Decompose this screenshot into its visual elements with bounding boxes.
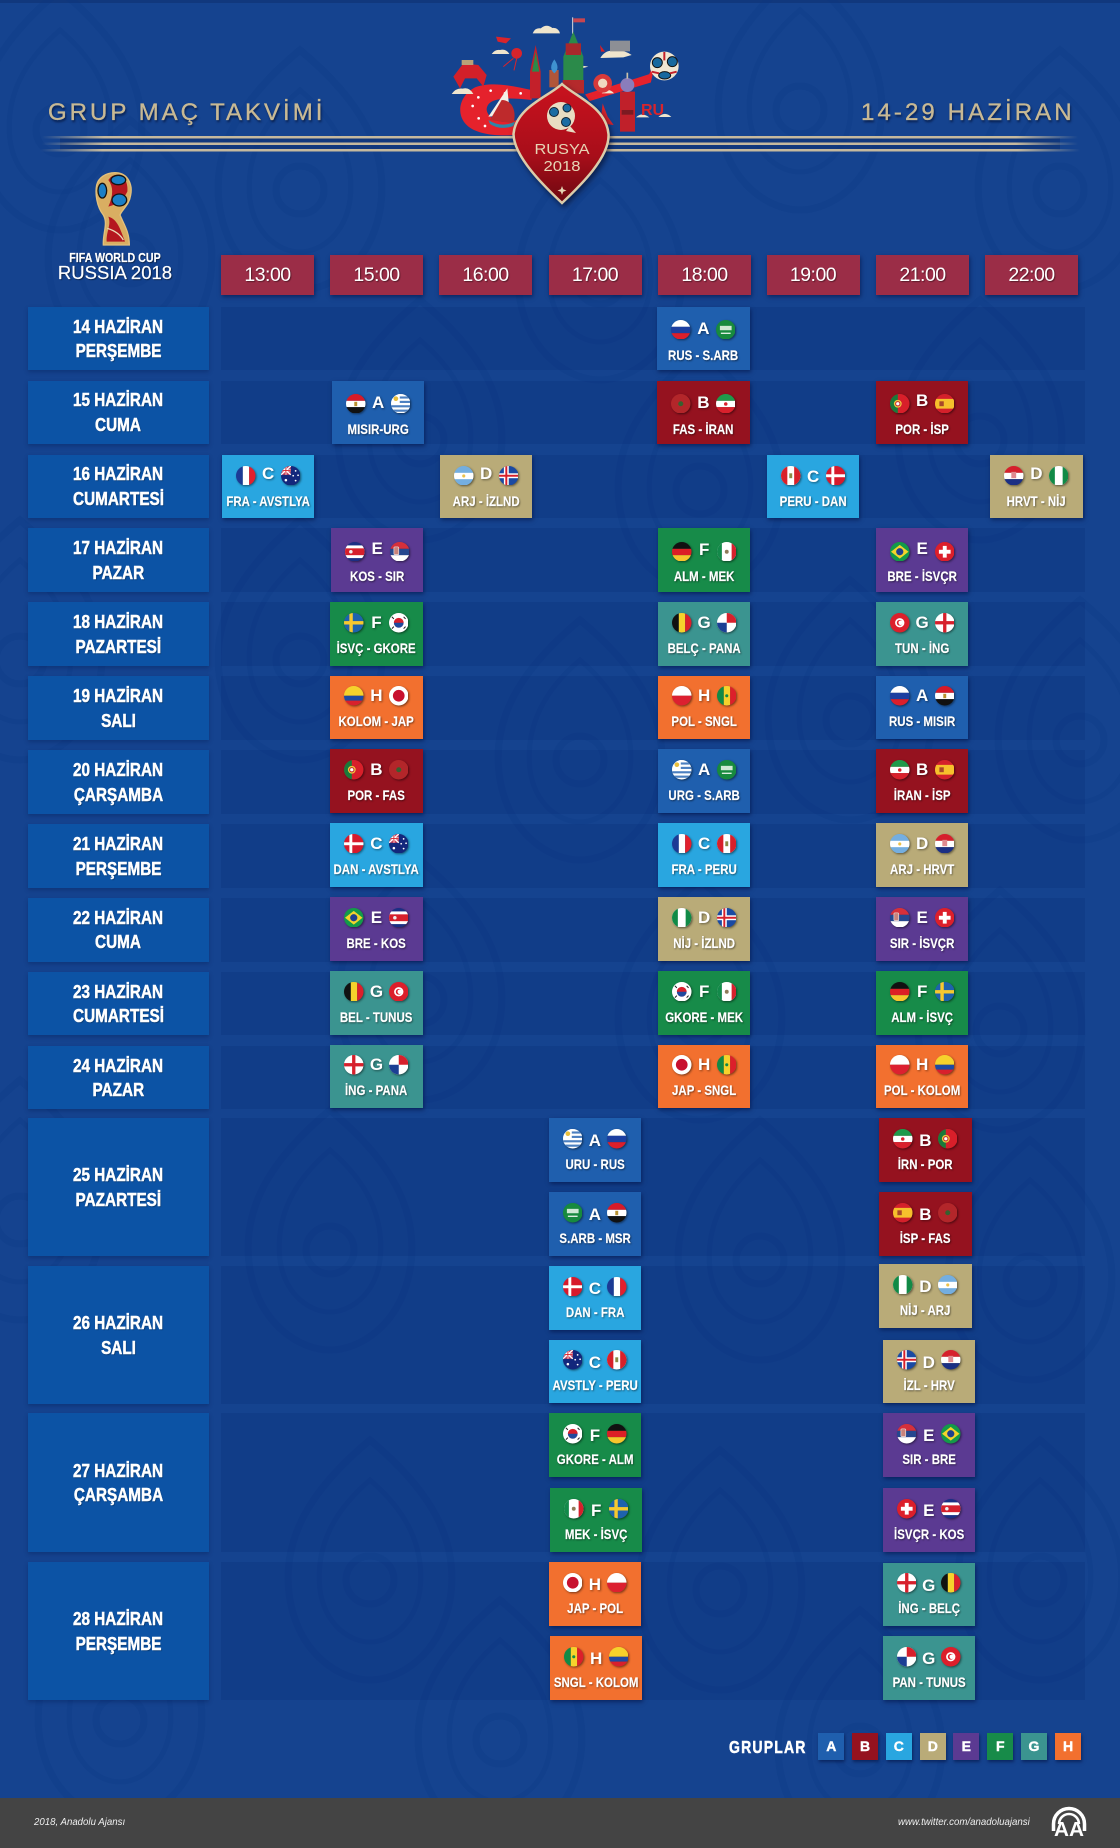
match: KOLOM - JAP	[330, 676, 423, 739]
day: 28 Haziran: PERŞEMBE	[75, 1634, 161, 1654]
match: İRAN - İSP: B	[916, 760, 928, 779]
match: JAP - POL: H	[589, 1575, 601, 1594]
day: 20 Haziran: 20 HAZİRAN	[73, 760, 163, 780]
day: 14 Haziran	[28, 307, 209, 370]
match: RUS - S.ARB: A	[697, 319, 710, 338]
legend chip E: E	[962, 1738, 971, 1754]
time: 18:00: 18:00	[681, 264, 728, 286]
match: ARJ - HRVT: ARJ - HRVT	[890, 860, 954, 876]
day: 14 Haziran: 14 HAZİRAN	[73, 317, 163, 337]
match: SIR - BRE	[883, 1413, 975, 1477]
match: SIR - İSVÇR: SIR - İSVÇR	[890, 934, 954, 950]
match: POR - İSP: POR - İSP	[895, 421, 949, 437]
day: 16 Haziran: 16 HAZİRAN	[73, 464, 163, 484]
match: FAS - İRAN: FAS - İRAN	[673, 421, 734, 437]
match: NİJ - İZLND: NİJ - İZLND	[673, 934, 735, 950]
day: 25 Haziran	[28, 1118, 209, 1256]
match: İRN - POR: B	[919, 1131, 932, 1150]
time: 22:00: 22:00	[1008, 264, 1055, 286]
day: 15 Haziran: 15 HAZİRAN	[73, 390, 163, 410]
match: DAN - FRA: C	[589, 1279, 601, 1298]
match: BRE - KOS	[330, 897, 423, 961]
match: MEK - İSVÇ: F	[591, 1501, 601, 1520]
match: PAN - TUNUS	[883, 1636, 975, 1700]
match: KOS - SIR: KOS - SIR	[350, 568, 404, 584]
match: İSP - FAS: İSP - FAS	[900, 1230, 951, 1246]
match: POL - SNGL: H	[698, 686, 710, 705]
day: 18 Haziran: PAZARTESİ	[75, 637, 161, 657]
day: 15 Haziran: CUMA	[95, 415, 141, 435]
day: 19 Haziran: SALI	[101, 711, 136, 731]
time: 21:00	[876, 255, 969, 295]
day: 25 Haziran: 25 HAZİRAN	[73, 1165, 163, 1185]
match: SIR - BRE: E	[923, 1426, 934, 1445]
match: SNGL - KOLOM	[550, 1636, 642, 1700]
match: İNG - BELÇ	[883, 1563, 975, 1626]
match: İZL - HRV	[883, 1340, 975, 1403]
footer url: www.twitter.com/anadoluajansi	[898, 1816, 1030, 1828]
time: 13:00	[221, 255, 314, 295]
day: 16 Haziran	[28, 454, 209, 518]
match: NİJ - ARJ	[879, 1264, 972, 1328]
match: S.ARB - MSR	[549, 1192, 641, 1256]
day: 27 Haziran: ÇARŞAMBA	[74, 1485, 163, 1505]
match: GKORE - ALM: GKORE - ALM	[557, 1451, 633, 1467]
match: SIR - İSVÇR	[876, 897, 968, 961]
match: ALM - İSVÇ	[876, 971, 968, 1035]
match: RUS - S.ARB	[657, 307, 750, 370]
match: URG - S.ARB: A	[698, 760, 710, 779]
match: BELÇ - PANA: BELÇ - PANA	[668, 640, 741, 656]
day: 27 Haziran: 27 HAZİRAN	[73, 1461, 163, 1481]
day: 27 Haziran	[28, 1413, 209, 1552]
day: 22 Haziran	[28, 898, 209, 962]
badge: Rusya 2018: 2018	[544, 158, 580, 175]
match: İSVÇR - KOS: İSVÇR - KOS	[894, 1526, 964, 1542]
day: 24 Haziran	[28, 1046, 209, 1109]
day: 24 Haziran: PAZAR	[92, 1080, 144, 1100]
match: NİJ - ARJ: NİJ - ARJ	[900, 1302, 951, 1318]
match: BEL - TUNUS	[330, 971, 423, 1035]
match: POL - SNGL: POL - SNGL	[671, 713, 737, 729]
match: PERU - DAN	[767, 454, 859, 518]
match: ALM - MEK: F	[699, 540, 709, 559]
match: DAN - AVSTLYA: DAN - AVSTLYA	[334, 860, 419, 876]
legend chip A: A	[826, 1738, 836, 1754]
match: SIR - İSVÇR: E	[916, 908, 928, 926]
match: PERU - DAN: C	[807, 466, 819, 486]
legend chip C	[886, 1733, 912, 1760]
match: İSVÇR - KOS: E	[923, 1501, 934, 1520]
match: SIR - BRE: SIR - BRE	[902, 1451, 956, 1467]
match: JAP - SNGL: JAP - SNGL	[672, 1082, 736, 1098]
day: 21 Haziran: PERŞEMBE	[75, 859, 161, 879]
match: BRE - İSVÇR: BRE - İSVÇR	[887, 568, 957, 584]
match: KOLOM - JAP: H	[370, 686, 383, 705]
badge: Rusya 2018: RUSYA	[534, 141, 590, 158]
match: NİJ - İZLND	[658, 897, 750, 961]
legend chip G	[1021, 1733, 1047, 1760]
match: İRN - POR	[879, 1118, 972, 1182]
day: 23 Haziran	[28, 972, 209, 1035]
day: 20 Haziran	[28, 750, 209, 814]
match: ALM - MEK: ALM - MEK	[674, 568, 734, 584]
match: FAS - İRAN: B	[697, 393, 710, 412]
match: DAN - FRA: DAN - FRA	[566, 1304, 624, 1320]
match: İSVÇ - GKORE: İSVÇ - GKORE	[337, 640, 416, 656]
match: MISIR-URG: MISIR-URG	[348, 421, 409, 437]
time: 13:00: 13:00	[244, 264, 291, 286]
time: 19:00	[766, 255, 860, 295]
match: KOLOM - JAP: KOLOM - JAP	[339, 713, 414, 729]
match: İSVÇ - GKORE: F	[371, 613, 382, 632]
match: İRAN - İSP	[876, 749, 968, 813]
date range: 14-29 HAZİRAN	[861, 99, 1075, 126]
legend chip G: G	[1029, 1738, 1039, 1754]
match: POL - SNGL	[658, 676, 750, 739]
match: İSVÇ - GKORE	[330, 602, 423, 666]
day: 21 Haziran	[28, 824, 209, 888]
match: POL - KOLOM: H	[916, 1055, 928, 1074]
match: İNG - PANA	[330, 1045, 423, 1108]
legend chip B: B	[860, 1738, 870, 1754]
match: İNG - BELÇ: G	[922, 1576, 935, 1595]
legend title: GRUPLAR	[729, 1737, 807, 1757]
time: 22:00	[985, 255, 1078, 295]
match: TUN - İNG: TUN - İNG	[895, 640, 949, 656]
day: 25 Haziran: PAZARTESİ	[75, 1190, 161, 1210]
match: ALM - MEK	[658, 528, 750, 592]
legend chip C: C	[894, 1738, 904, 1754]
match: BEL - TUNUS: G	[370, 982, 383, 1000]
match: GKORE - ALM	[549, 1413, 641, 1477]
match: GKORE - MEK	[658, 971, 750, 1035]
match: S.ARB - MSR: A	[589, 1205, 601, 1224]
match: PAN - TUNUS: G	[922, 1649, 935, 1668]
match: İRN - POR: İRN - POR	[898, 1156, 953, 1172]
time: 15:00	[330, 255, 423, 295]
footer	[0, 1798, 1120, 1848]
match: URG - S.ARB: URG - S.ARB	[668, 787, 740, 803]
match: İNG - PANA: İNG - PANA	[345, 1082, 408, 1098]
match: HRVT - NİJ	[990, 454, 1083, 518]
time: 19:00: 19:00	[790, 264, 836, 286]
match: FRA - PERU	[658, 823, 750, 887]
match: SNGL - KOLOM: SNGL - KOLOM	[554, 1674, 638, 1690]
icon: trophy	[95, 172, 132, 246]
match: POL - KOLOM	[876, 1045, 968, 1108]
match: FRA - PERU: C	[698, 834, 710, 852]
match: JAP - POL	[549, 1562, 641, 1626]
legend chip A	[818, 1733, 844, 1760]
match: ALM - İSVÇ: ALM - İSVÇ	[891, 1008, 953, 1024]
match: ARJ - HRVT	[876, 823, 968, 887]
match: İSVÇR - KOS	[883, 1488, 975, 1552]
match: PERU - DAN: PERU - DAN	[780, 493, 847, 509]
illustration: Russia skyline	[452, 17, 679, 136]
match: POL - KOLOM: POL - KOLOM	[884, 1082, 960, 1098]
logo: FIFA World Cup Russia 2018	[58, 172, 173, 283]
legend chip D	[920, 1733, 946, 1760]
match: POR - İSP	[876, 381, 968, 444]
match: RUS - MISIR: RUS - MISIR	[889, 713, 955, 729]
match: URU - RUS	[549, 1118, 641, 1182]
match: HRVT - NİJ: HRVT - NİJ	[1007, 493, 1066, 509]
icon: Anadolu Agency logo	[1052, 1806, 1086, 1840]
match: POR - İSP: B	[916, 391, 928, 410]
match: MEK - İSVÇ	[550, 1488, 642, 1552]
match: RUS - MISIR: A	[916, 686, 928, 705]
match: NİJ - ARJ: D	[919, 1277, 932, 1296]
time header row	[220, 255, 1081, 299]
match: NİJ - İZLND: D	[698, 908, 710, 926]
match: ARJ - İZLND	[440, 454, 532, 518]
logo text: Russia 2018: RUSSIA 2018	[58, 262, 172, 283]
day: 26 Haziran	[28, 1266, 209, 1404]
match: FRA - AVSTLYA: C	[262, 464, 274, 483]
day: 18 Haziran: 18 HAZİRAN	[73, 612, 163, 632]
legend chip B	[852, 1733, 878, 1760]
match: URG - S.ARB	[658, 749, 750, 813]
time: 16:00: 16:00	[462, 264, 509, 286]
day: 18 Haziran	[28, 602, 209, 666]
day: 17 Haziran	[28, 528, 209, 592]
match: SNGL - KOLOM: H	[590, 1649, 602, 1668]
match: JAP - SNGL: H	[698, 1055, 710, 1074]
day: 26 Haziran: SALI	[101, 1338, 136, 1358]
match: İNG - BELÇ: İNG - BELÇ	[898, 1600, 960, 1616]
day: 14 Haziran: PERŞEMBE	[75, 341, 161, 361]
match: GKORE - MEK: F	[699, 982, 709, 1000]
day: 26 Haziran: 26 HAZİRAN	[73, 1313, 163, 1333]
match: GKORE - MEK: GKORE - MEK	[665, 1008, 743, 1024]
match: POR - FAS: POR - FAS	[348, 787, 405, 803]
match: İSP - FAS	[879, 1192, 972, 1256]
match: BRE - KOS: BRE - KOS	[347, 934, 406, 950]
match: HRVT - NİJ: D	[1030, 464, 1043, 483]
match: MEK - İSVÇ: MEK - İSVÇ	[565, 1526, 627, 1542]
day: 19 Haziran	[28, 676, 209, 740]
day: 24 Haziran: 24 HAZİRAN	[73, 1056, 163, 1076]
badge: Rusya 2018	[510, 82, 616, 210]
time: 17:00: 17:00	[572, 264, 618, 286]
match: GKORE - ALM: F	[590, 1426, 600, 1445]
match: FAS - İRAN	[657, 381, 750, 444]
match: FRA - PERU: FRA - PERU	[672, 860, 737, 876]
match: URU - RUS: A	[589, 1131, 601, 1150]
day: 19 Haziran: 19 HAZİRAN	[73, 686, 163, 706]
match: MISIR-URG	[332, 381, 424, 444]
day: 23 Haziran: 23 HAZİRAN	[73, 982, 163, 1002]
legend chip F: F	[996, 1738, 1005, 1754]
match: ARJ - İZLND: D	[480, 464, 492, 483]
day: 21 Haziran: 21 HAZİRAN	[73, 834, 163, 854]
match: ARJ - İZLND: ARJ - İZLND	[453, 493, 520, 509]
match: İZL - HRV: İZL - HRV	[903, 1377, 954, 1393]
match: BELÇ - PANA	[658, 602, 750, 666]
match: POR - FAS: B	[370, 760, 383, 779]
match: AVSTLY - PERU: C	[589, 1353, 601, 1372]
match: JAP - SNGL	[658, 1045, 750, 1108]
legend chip H	[1055, 1733, 1081, 1760]
match: AVSTLY - PERU	[549, 1340, 641, 1403]
match: TUN - İNG	[876, 602, 968, 666]
match: POR - FAS	[330, 749, 423, 813]
match: FRA - AVSTLYA	[222, 454, 314, 518]
match: DAN - FRA	[549, 1266, 641, 1330]
day: 15 Haziran	[28, 381, 209, 444]
match: DAN - AVSTLYA	[330, 823, 423, 887]
day labels column	[27, 307, 210, 1703]
match: BRE - KOS: E	[371, 908, 382, 926]
day: 22 Haziran: CUMA	[95, 932, 141, 952]
time: 21:00: 21:00	[899, 264, 946, 286]
time: 15:00: 15:00	[353, 264, 400, 286]
match: İRAN - İSP: İRAN - İSP	[894, 787, 951, 803]
time: 18:00	[658, 255, 751, 295]
day: 28 Haziran	[28, 1562, 209, 1700]
legend chip H: H	[1063, 1738, 1073, 1754]
match: RUS - MISIR	[876, 676, 968, 739]
match: BRE - İSVÇR	[876, 528, 968, 592]
day: 20 Haziran: ÇARŞAMBA	[74, 785, 163, 805]
match: RUS - S.ARB: RUS - S.ARB	[668, 347, 739, 363]
day: 17 Haziran: 17 HAZİRAN	[73, 538, 163, 558]
match: İNG - PANA: G	[370, 1055, 383, 1074]
match: ARJ - HRVT: D	[916, 834, 928, 852]
time: 16:00	[439, 255, 532, 295]
legend chip E	[953, 1733, 979, 1760]
match: KOS - SIR: E	[371, 539, 383, 558]
illustration: Russia skyline: RU	[641, 102, 664, 119]
day: 23 Haziran: CUMARTESİ	[73, 1006, 164, 1026]
match: İZL - HRV: D	[923, 1353, 935, 1372]
match: ALM - İSVÇ: F	[917, 982, 927, 1000]
match: AVSTLY - PERU: AVSTLY - PERU	[552, 1377, 638, 1393]
legend chip D: D	[928, 1738, 938, 1754]
logo text: FIFA World Cup: FIFA WORLD CUP	[69, 250, 161, 265]
match: FRA - AVSTLYA: FRA - AVSTLYA	[226, 493, 310, 509]
match: KOS - SIR	[331, 528, 423, 592]
match: JAP - POL: JAP - POL	[567, 1600, 623, 1616]
legend chip F	[987, 1733, 1013, 1760]
match: TUN - İNG: G	[916, 613, 929, 632]
day: 17 Haziran: PAZAR	[92, 563, 144, 583]
time: 17:00	[548, 255, 642, 295]
match: BEL - TUNUS: BEL - TUNUS	[340, 1008, 413, 1024]
match: MISIR-URG: A	[372, 393, 384, 412]
day: 22 Haziran: 22 HAZİRAN	[73, 908, 163, 928]
match: DAN - AVSTLYA: C	[370, 834, 383, 852]
day: 28 Haziran: 28 HAZİRAN	[73, 1609, 163, 1629]
match: PAN - TUNUS: PAN - TUNUS	[892, 1674, 965, 1690]
match: BRE - İSVÇR: E	[916, 539, 928, 558]
match: S.ARB - MSR: S.ARB - MSR	[559, 1230, 631, 1246]
title: GRUP MAÇ TAKVİMİ	[48, 99, 325, 126]
day: 16 Haziran: CUMARTESİ	[73, 489, 164, 509]
gold divider lines	[43, 136, 1077, 152]
match: URU - RUS: URU - RUS	[565, 1156, 625, 1172]
match: İSP - FAS: B	[919, 1205, 932, 1224]
match: BELÇ - PANA: G	[698, 613, 711, 632]
footer credit: 2018, Anadolu Ajansı	[34, 1816, 125, 1828]
